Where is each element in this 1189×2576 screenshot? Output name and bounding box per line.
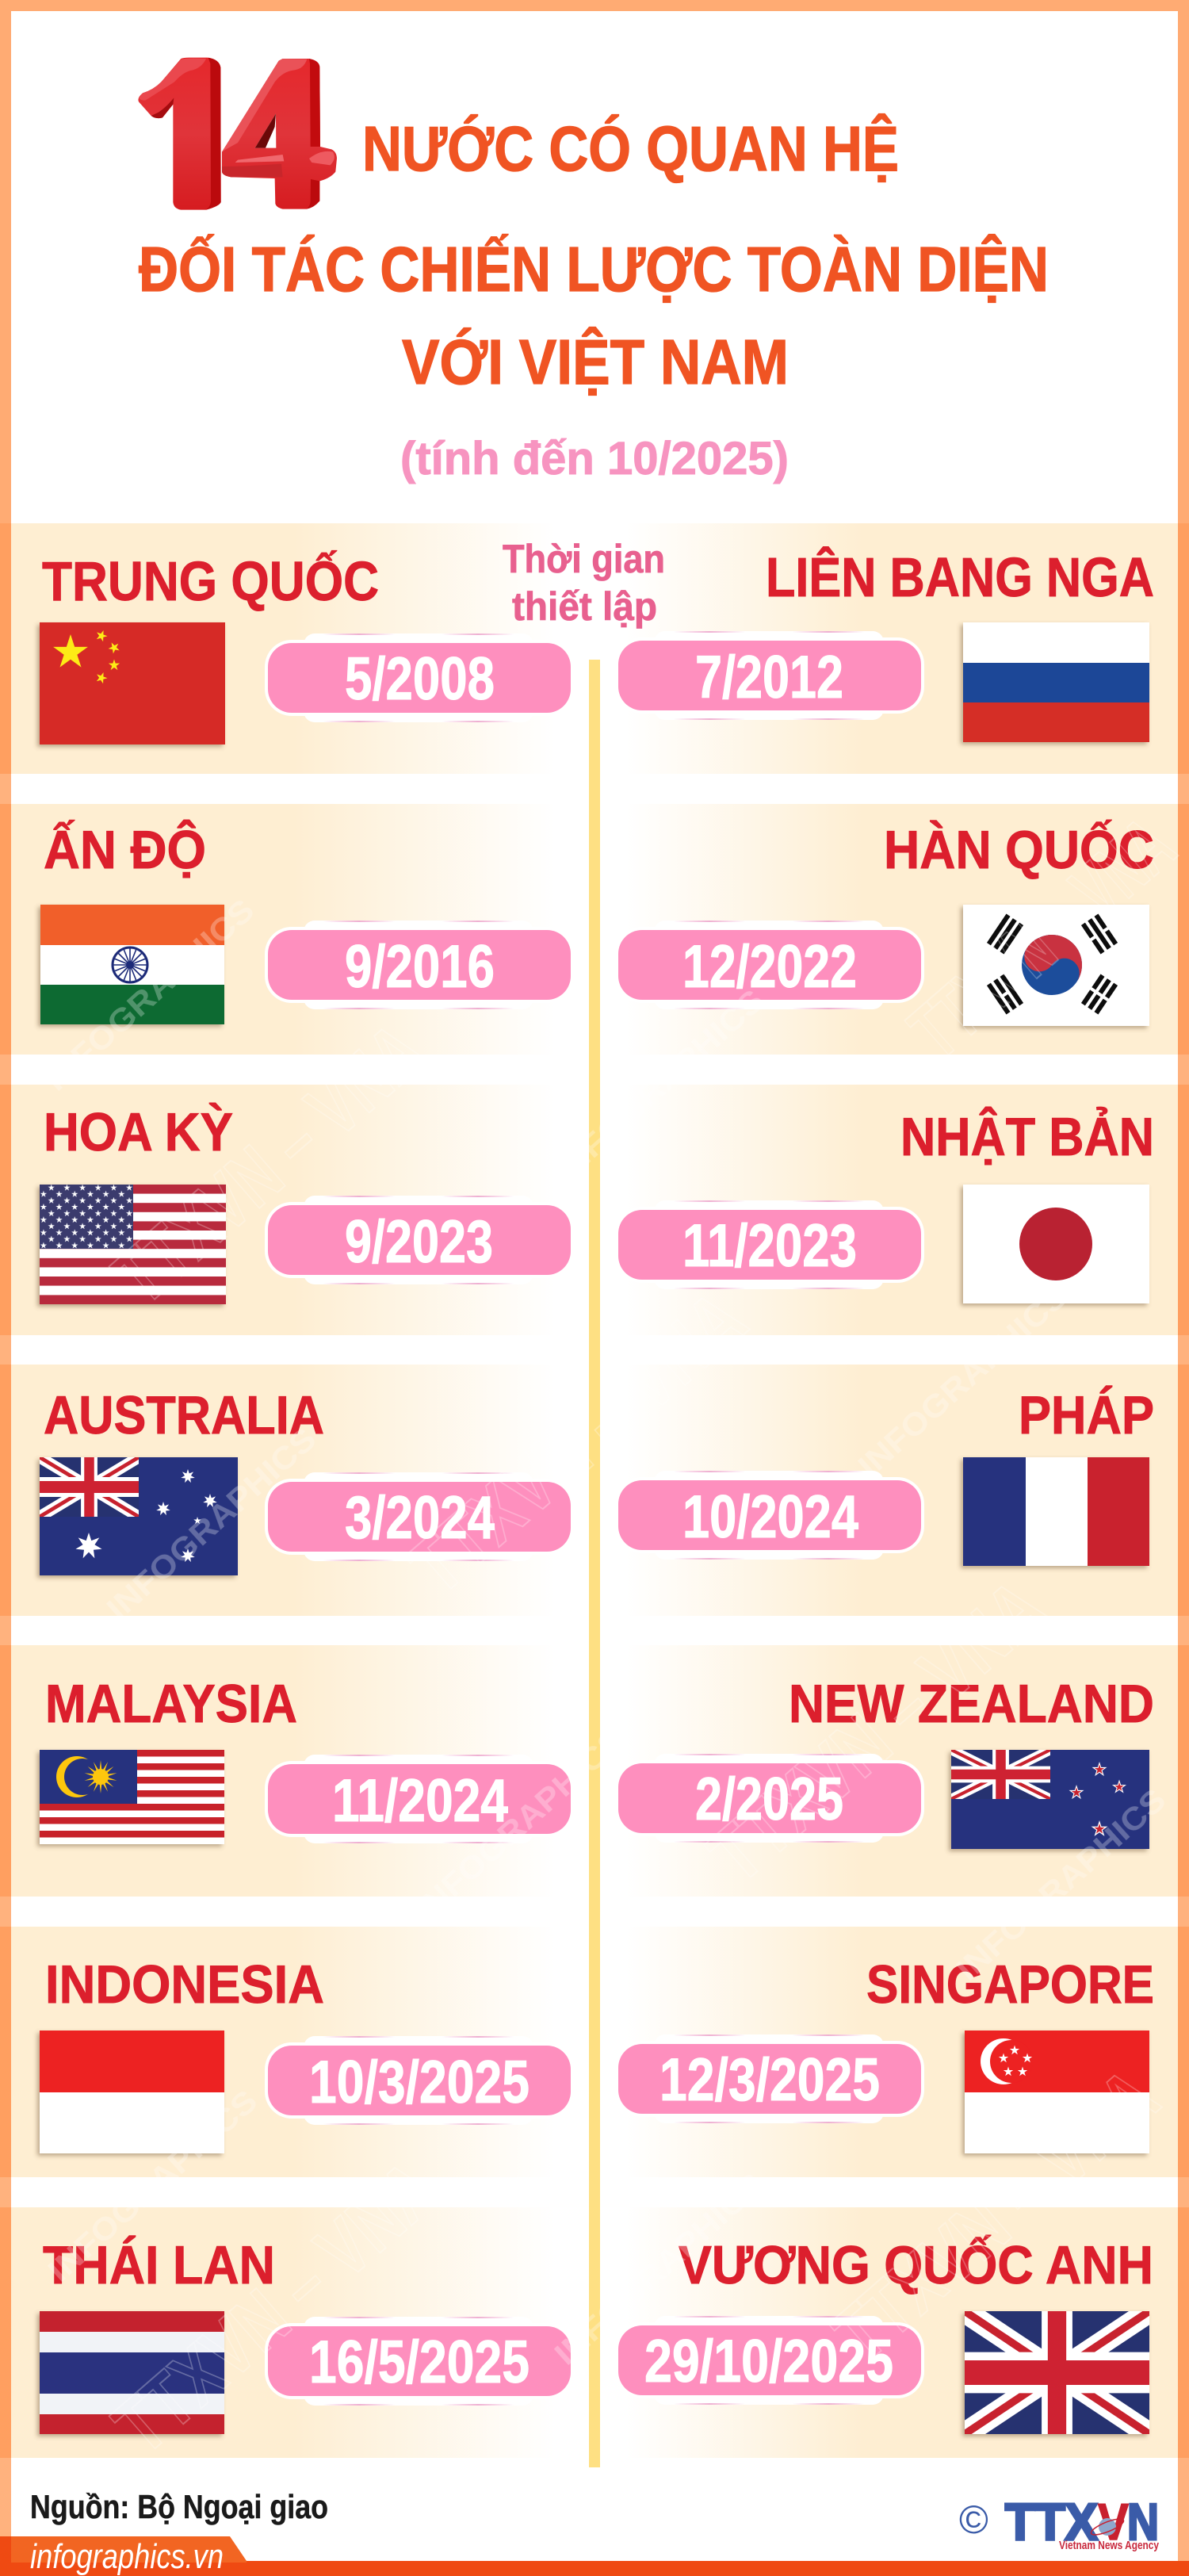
- date pill: 9/2023: [345, 1208, 493, 1276]
- date pill: 3/2024: [345, 1484, 495, 1552]
- flag: New Zealand: [951, 1750, 1149, 1849]
- country name: HÀN QUỐC: [884, 819, 1154, 880]
- date pill: 11/2024: [332, 1767, 508, 1835]
- panel: Liên bang Nga: [600, 523, 1178, 774]
- date pill: [265, 633, 574, 722]
- panel: Nhật Bản: [600, 1085, 1178, 1335]
- watermark: TTXVN – VNA: [693, 1563, 1062, 1900]
- panel: Vương quốc Anh: [600, 2207, 1178, 2458]
- title: VỚI VIỆT NAM: [402, 327, 789, 397]
- subtitle: as of date: (tính đến 10/2025): [400, 433, 789, 484]
- panel: Ấn Độ: [11, 804, 589, 1055]
- date pill: [615, 1754, 924, 1843]
- watermark: INFOGRAPHICS: [852, 1279, 1074, 1484]
- panel: New Zealand: [600, 1645, 1178, 1897]
- date pill: [615, 1200, 924, 1289]
- panel: Australia: [11, 1365, 589, 1616]
- title: ĐỐI TÁC CHIẾN LƯỢC TOÀN DIỆN: [139, 234, 1049, 304]
- date pill: [265, 1755, 574, 1843]
- country name: NEW ZEALAND: [789, 1674, 1154, 1734]
- flag: South Korea: [963, 905, 1149, 1026]
- country name: ẤN ĐỘ: [44, 819, 206, 880]
- logo: TTXVN: [1005, 2493, 1160, 2552]
- title: NƯỚC CÓ QUAN HỆ: [362, 113, 899, 184]
- flag: Russia: [963, 622, 1149, 742]
- date pill: [265, 1472, 574, 1561]
- date pill: [265, 921, 574, 1009]
- logo: TTXVN: V: [1098, 2493, 1129, 2551]
- flag: India: [40, 905, 224, 1024]
- copyright mark: ©: [959, 2498, 988, 2542]
- flag: Thailand: [40, 2311, 224, 2434]
- panel: Hàn Quốc: [600, 804, 1178, 1055]
- date pill: [265, 2036, 574, 2125]
- country name: SINGAPORE: [866, 1954, 1154, 2015]
- logo: TTXVN: N: [1127, 2493, 1159, 2551]
- country name: VƯƠNG QUỐC ANH: [679, 2234, 1153, 2295]
- watermark: INFOGRAPHICS: [549, 983, 770, 1188]
- date pill: 16/5/2025: [309, 2329, 530, 2396]
- flag: Indonesia: [40, 2031, 224, 2153]
- watermark: INFOGRAPHICS: [549, 2167, 770, 2372]
- big 3D number 14: [138, 58, 337, 210]
- country name: INDONESIA: [45, 1954, 324, 2015]
- country name: THÁI LAN: [43, 2235, 275, 2295]
- flag: United Kingdom: [965, 2311, 1149, 2434]
- date pill: [615, 631, 924, 720]
- panel: Singapore: [600, 1927, 1178, 2177]
- logo: TTXVN: Vietnam News Agency: [1059, 2539, 1160, 2552]
- watermark: INFOGRAPHICS: [409, 1722, 631, 1927]
- country name: MALAYSIA: [45, 1674, 297, 1734]
- country name: NHẬT BẢN: [900, 1106, 1154, 1167]
- date pill: 12/3/2025: [659, 2046, 880, 2114]
- date pill: [615, 1471, 924, 1560]
- date pill: [615, 2034, 924, 2123]
- panel: Thái Lan: [11, 2207, 589, 2458]
- watermark: INFOGRAPHICS: [39, 893, 261, 1098]
- flag: Malaysia: [40, 1750, 224, 1844]
- timeline heading: Thời gian: [503, 537, 665, 581]
- watermark: TTXVN – VNA: [393, 1274, 763, 1612]
- flag: Japan: [963, 1185, 1149, 1303]
- watermark: TTXVN – VNA: [97, 2144, 455, 2471]
- flag: USA: [40, 1185, 226, 1304]
- watermark: TTXVN – VNA: [97, 1006, 441, 1322]
- logo: TTXVN: TTX: [1005, 2493, 1098, 2551]
- panel: Trung Quốc: [11, 523, 589, 774]
- date pill: 7/2012: [695, 644, 843, 711]
- timeline heading: [503, 537, 665, 629]
- flag: Australia: [40, 1457, 238, 1575]
- title: [139, 113, 1049, 397]
- date pill: 11/2023: [682, 1212, 857, 1280]
- date pill: 12/2022: [682, 933, 857, 1001]
- flag: France: [963, 1457, 1149, 1566]
- footer bar: [0, 2536, 1189, 2576]
- date pill: 29/10/2025: [644, 2328, 893, 2395]
- date pill: 2/2025: [695, 1766, 843, 1833]
- country name: PHÁP: [1019, 1385, 1154, 1445]
- panel: Hoa Kỳ: [11, 1085, 589, 1335]
- flag: Singapore: [965, 2031, 1149, 2153]
- timeline heading: thiết lập: [512, 584, 657, 629]
- panel: Pháp: [600, 1365, 1178, 1616]
- site name: infographics.vn: [30, 2537, 224, 2576]
- watermark: [39, 801, 1189, 2471]
- date pill: [615, 2316, 924, 2405]
- country name: TRUNG QUỐC: [42, 549, 379, 612]
- timeline center line: [589, 660, 600, 2467]
- date pill: 5/2008: [345, 645, 495, 713]
- panel: Malaysia: [11, 1645, 589, 1897]
- panel: Indonesia: [11, 1927, 589, 2177]
- date pill: 9/2016: [345, 933, 495, 1001]
- date pill: 10/2024: [682, 1483, 858, 1551]
- date pill: [265, 2317, 574, 2406]
- date pill: [615, 921, 924, 1009]
- watermark: INFOGRAPHICS: [101, 1422, 323, 1627]
- footer: source: Nguồn: Bộ Ngoại giao: [30, 2488, 328, 2525]
- watermark: INFOGRAPHICS: [950, 1782, 1172, 1988]
- country name: AUSTRALIA: [44, 1385, 324, 1445]
- date pill: 10/3/2025: [309, 2049, 530, 2116]
- date pill: [265, 1196, 574, 1284]
- watermark: INFOGRAPHICS: [42, 2084, 264, 2289]
- country name: HOA KỲ: [44, 1102, 233, 1162]
- flag: China: [40, 622, 225, 744]
